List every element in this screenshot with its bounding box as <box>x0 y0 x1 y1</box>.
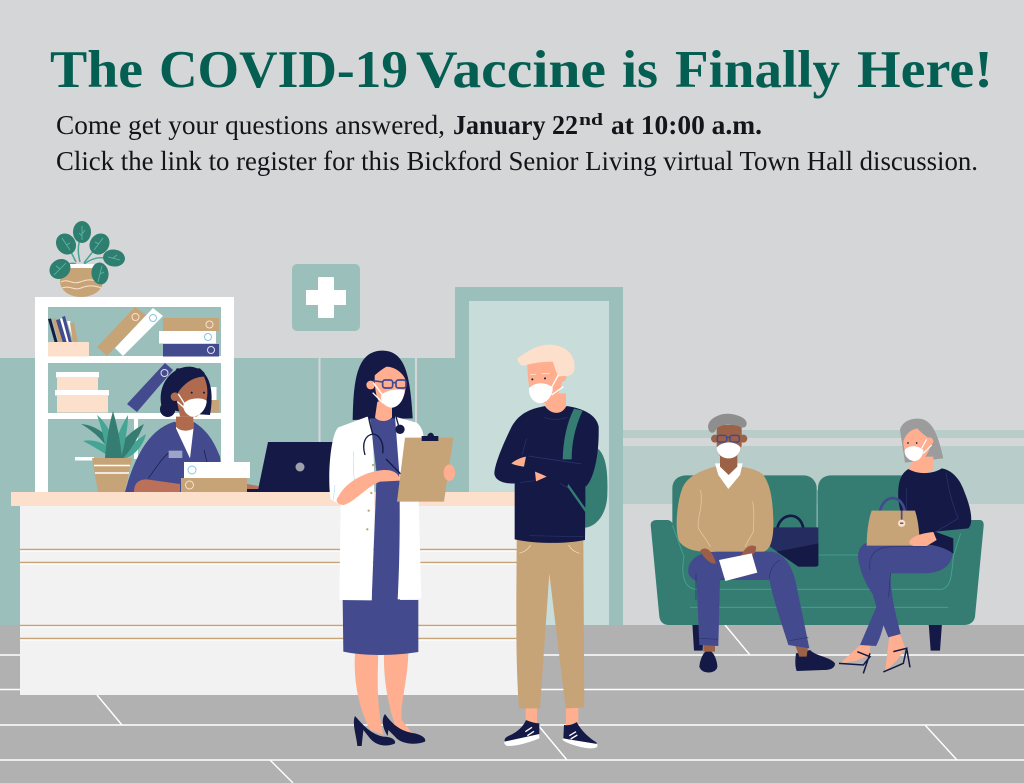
title <box>50 41 993 99</box>
hair <box>353 351 413 420</box>
title: Here! <box>857 41 993 99</box>
desk <box>11 492 521 695</box>
scrubs <box>125 422 223 492</box>
high heels <box>354 716 395 746</box>
face <box>903 428 932 462</box>
sweater <box>898 468 971 553</box>
face mask <box>183 398 207 417</box>
face mask <box>381 389 405 408</box>
sandals <box>839 648 910 673</box>
glasses <box>373 380 406 388</box>
shoes <box>699 651 717 673</box>
paperwork on desk <box>181 462 250 492</box>
sofa seat and arms <box>651 520 984 625</box>
crossed hands <box>511 457 547 481</box>
face mask <box>905 446 923 461</box>
hands <box>700 545 756 564</box>
event date: January 22 <box>453 110 578 140</box>
right wall stripes <box>623 430 1024 504</box>
trousers <box>688 552 809 648</box>
back leg <box>870 572 901 637</box>
hair back <box>900 419 943 463</box>
face <box>176 377 207 417</box>
neck <box>545 393 566 413</box>
registration line: Click the link to register for this Bickford Senior Living virtual Town Hall discussion. <box>56 146 978 176</box>
books <box>48 316 89 356</box>
binders <box>97 307 219 412</box>
title: The <box>50 41 143 99</box>
sweater <box>677 466 773 552</box>
event time: at 10:00 a.m. <box>611 110 762 140</box>
head <box>527 360 563 403</box>
title: Finally <box>675 41 840 99</box>
face mask <box>529 383 553 403</box>
sneakers <box>504 720 597 748</box>
sofa <box>651 475 984 651</box>
receptionist <box>125 367 258 492</box>
briefcase <box>770 516 818 567</box>
back wall panels <box>0 358 470 625</box>
stethoscope <box>364 417 399 455</box>
glasses <box>717 435 739 442</box>
sofa legs <box>692 623 704 651</box>
dress <box>343 418 418 655</box>
neck <box>375 402 392 421</box>
lab coat <box>329 417 374 600</box>
hair <box>517 345 575 377</box>
date ordinal: nd <box>579 110 604 129</box>
title: COVID-19 <box>159 41 408 99</box>
trousers <box>516 540 584 708</box>
grey hair <box>708 414 747 433</box>
ankles <box>526 707 537 725</box>
clipboard <box>397 438 453 502</box>
eyes <box>531 378 533 380</box>
front leg <box>858 542 953 646</box>
aloe plant <box>81 411 146 492</box>
title: is <box>622 41 658 99</box>
face <box>375 367 406 408</box>
handbag <box>867 498 919 546</box>
doctor <box>329 351 455 746</box>
potted plant on shelf <box>46 221 126 297</box>
hand <box>909 532 937 546</box>
ankle <box>795 645 808 657</box>
sweater <box>494 406 599 543</box>
laptop <box>247 442 333 492</box>
bookshelf <box>35 297 234 492</box>
neck <box>908 457 933 473</box>
title: Vaccine <box>416 41 606 99</box>
invitation text <box>56 110 978 176</box>
shirt collar <box>715 463 743 489</box>
man with backpack <box>494 345 607 748</box>
floor <box>0 625 1024 783</box>
face <box>720 450 737 475</box>
backpack <box>585 443 607 528</box>
seated man <box>677 414 835 673</box>
icon: medical cross sign <box>292 264 360 331</box>
hair bun <box>160 402 175 417</box>
backpack strap <box>563 409 586 513</box>
face mask <box>717 442 741 458</box>
pen <box>386 459 401 474</box>
door <box>455 287 623 625</box>
legs <box>355 653 383 735</box>
storage boxes <box>55 372 109 412</box>
sofa back cushions <box>672 475 817 567</box>
feet <box>840 643 871 663</box>
seated woman <box>839 419 971 673</box>
arm <box>337 470 400 505</box>
forearm <box>134 479 180 492</box>
paper <box>719 553 757 581</box>
invitation lead-in: Come get your questions answered, <box>56 110 445 140</box>
